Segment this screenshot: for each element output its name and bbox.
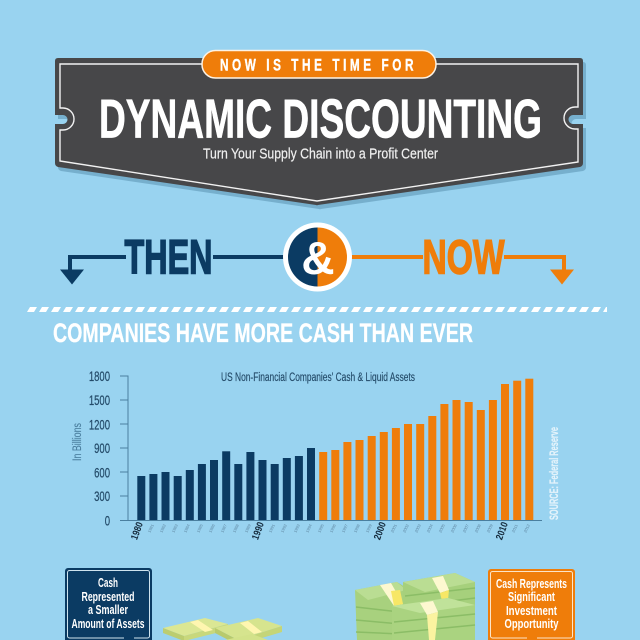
callout: then <box>65 568 152 640</box>
y axis labels <box>89 368 110 529</box>
bar chart <box>72 368 561 541</box>
minor year labels: 2011 <box>511 523 519 533</box>
chart title: US Non-Financial Companies' Cash & Liquid Assets <box>221 372 415 384</box>
y axis labels: 600 <box>94 465 110 481</box>
minor year labels: 1985 <box>195 523 204 533</box>
banner pill: now is the time for <box>202 50 436 78</box>
minor year labels: 1987 <box>219 523 228 533</box>
decade labels: 1990 <box>250 520 267 541</box>
minor year labels: 2001 <box>389 523 398 533</box>
minor year labels: 1996 <box>328 523 337 533</box>
minor year labels: 1994 <box>304 523 313 533</box>
decade labels: 2000 <box>372 520 389 541</box>
minor year labels: 1998 <box>352 523 361 533</box>
icon: now arrow head <box>550 270 574 284</box>
y axis labels: 900 <box>94 440 110 457</box>
ampersand circle: & <box>301 232 335 284</box>
y axis labels: 1500 <box>89 392 110 409</box>
callout: now: Cash Represents <box>496 576 567 591</box>
y axis labels: 1800 <box>89 368 110 385</box>
minor year labels: 2007 <box>461 523 470 533</box>
minor year labels: 1981 <box>146 523 155 533</box>
icon: small cash stacks <box>163 618 282 640</box>
minor year labels: 1983 <box>170 523 179 533</box>
y axis labels: 0 <box>105 513 110 529</box>
y axis labels: 300 <box>94 488 110 505</box>
callout: now: Significant <box>508 589 555 604</box>
decade labels: 2010 <box>494 520 511 541</box>
orange bars: now <box>319 379 533 520</box>
minor year labels: 1986 <box>207 523 216 533</box>
callout: now: Investment <box>506 603 557 618</box>
minor year labels: 1989 <box>243 523 252 533</box>
callout: then: Represented <box>82 589 135 604</box>
front stack <box>392 598 475 640</box>
minor year labels: 1988 <box>231 523 240 533</box>
y axis title: In Billions <box>72 423 84 461</box>
subtitle: Turn Your Supply Chain into a Profit Center <box>203 146 438 162</box>
minor year labels: 1982 <box>158 523 167 533</box>
minor year labels: 2005 <box>437 523 446 533</box>
callout: then: Amount of Assets <box>72 616 144 631</box>
minor year labels: 1991 <box>267 523 276 533</box>
minor year labels: 2002 <box>401 523 410 533</box>
callout: then: Cash <box>98 575 118 590</box>
minor year labels: 1992 <box>279 523 288 533</box>
now side with arrow: NOW <box>422 232 505 284</box>
then side with arrow <box>60 232 285 284</box>
minor year labels: 1997 <box>340 523 349 533</box>
callout: then: a Smaller <box>88 602 128 617</box>
minor year labels: 1995 <box>316 523 325 533</box>
banner pill: now is the time for: NOW IS THE TIME FOR <box>220 56 417 74</box>
back right stack <box>403 573 475 640</box>
minor year labels <box>146 523 531 533</box>
source note: SOURCE: Federal Reserve <box>547 427 561 520</box>
decade labels: 1980 <box>129 520 146 541</box>
header banner <box>55 50 586 209</box>
back left stack <box>355 582 410 640</box>
now side with arrow <box>350 232 574 284</box>
then side with arrow: THEN <box>124 232 212 284</box>
minor year labels: 1999 <box>364 523 373 533</box>
ampersand circle <box>283 222 352 292</box>
minor year labels: 2012 <box>522 523 531 533</box>
decade labels <box>129 520 511 541</box>
minor year labels: 2004 <box>425 523 434 533</box>
callout: now <box>488 569 575 640</box>
minor year labels: 2008 <box>473 523 482 533</box>
callout: now: Opportunity <box>504 616 559 631</box>
y axis labels: 1200 <box>89 417 110 433</box>
axes <box>120 376 542 520</box>
icon: then arrow head <box>60 270 84 284</box>
minor year labels: 1984 <box>182 523 191 533</box>
minor year labels: 2006 <box>449 523 458 533</box>
icon: large cash stacks <box>355 573 475 640</box>
section heading: COMPANIES HAVE MORE CASH THAN EVER <box>53 318 473 348</box>
navy bars: then <box>137 448 315 520</box>
minor year labels: 1993 <box>292 523 301 533</box>
minor year labels: 2009 <box>485 523 494 533</box>
minor year labels: 2003 <box>413 523 422 533</box>
